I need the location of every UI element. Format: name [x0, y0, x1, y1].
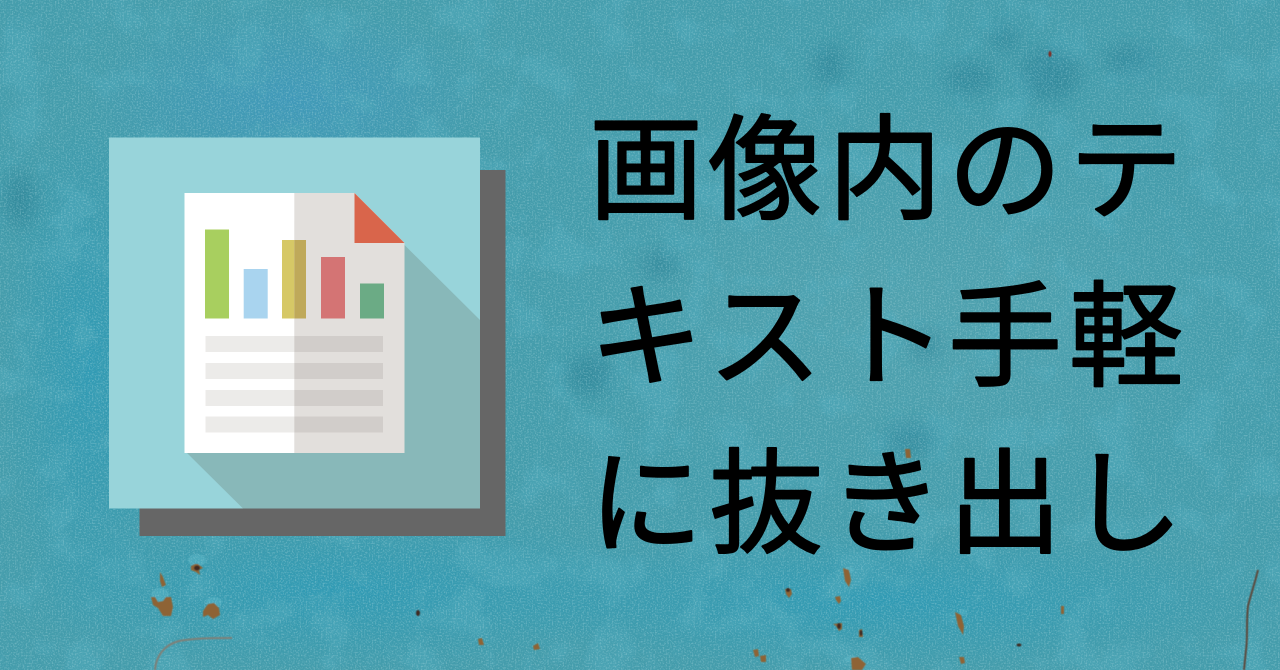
rust spots on the wall	[151, 51, 1258, 670]
title line 3: に抜き出し	[589, 442, 1183, 569]
card panel	[109, 138, 480, 508]
folded corner	[354, 193, 404, 243]
card drop shadow	[140, 170, 506, 536]
document long shadow	[187, 245, 480, 508]
title line 1: 画像内のテ	[589, 108, 1183, 235]
title text	[589, 108, 1183, 569]
title line 2: キスト手軽	[589, 275, 1183, 402]
icon: document card with drop shadow	[109, 138, 506, 536]
document sheet	[184, 193, 404, 453]
text lines on document	[206, 336, 383, 432]
bar chart	[205, 230, 384, 318]
darker blotches on the wall	[4, 24, 1156, 456]
